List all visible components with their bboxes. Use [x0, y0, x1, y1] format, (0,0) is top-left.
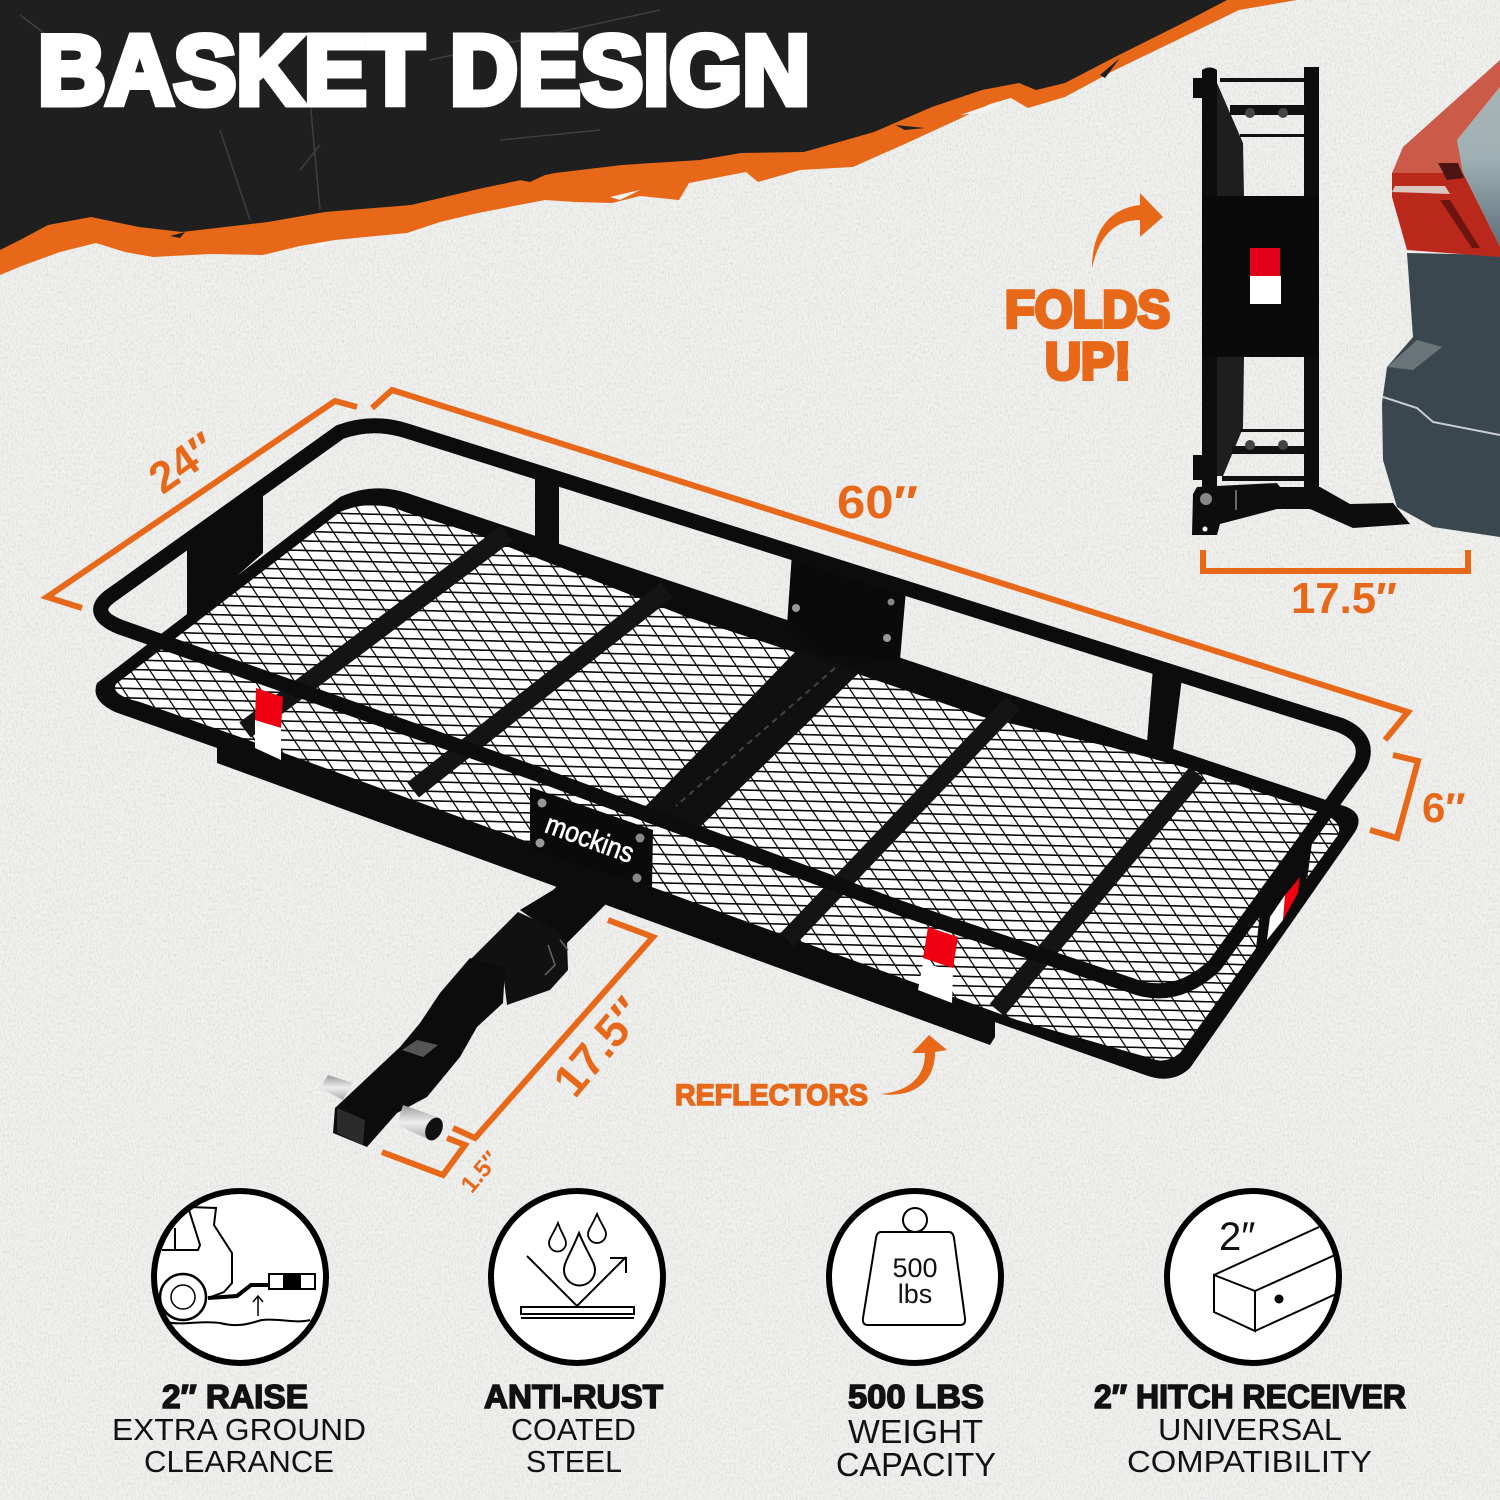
feature text: hitch: COMPATIBILITY [1127, 1444, 1372, 1479]
feature text: hitch [1094, 1378, 1406, 1479]
icon: 2 inch hitch receiver [1167, 1191, 1339, 1363]
lower floor beam [217, 735, 995, 1045]
feature text: weight: WEIGHT [848, 1413, 983, 1450]
feature text: weight [836, 1378, 996, 1483]
front reflector right [923, 927, 958, 968]
feature text: anti-rust [484, 1378, 663, 1479]
reflectors label: REFLECTORS [675, 1079, 868, 1112]
mesh floor [115, 505, 1339, 1061]
feature text: anti-rust: STEEL [526, 1444, 622, 1479]
dimension: hitch 1.5 inch: 1.5″ [456, 1146, 505, 1198]
title: BASKET DESIGN [38, 15, 810, 125]
folds up arrow [1092, 193, 1163, 268]
feature text: hitch: UNIVERSAL [1158, 1412, 1342, 1447]
icon: 500 lbs weight [829, 1191, 1001, 1363]
mockins logo: mockins [541, 808, 638, 869]
folded basket [1192, 67, 1410, 535]
folds up label: FOLDS [1005, 281, 1170, 339]
upright supports [187, 490, 263, 620]
feature text: raise: CLEARANCE [144, 1444, 334, 1479]
dimension: 6 inch: 6″ [1422, 784, 1465, 831]
cross bars [245, 533, 1197, 1010]
icon: 500 lbs weight: lbs [898, 1279, 932, 1309]
top rail [101, 426, 1363, 991]
dimension: 6 inch [1370, 755, 1465, 838]
centre fold bar [640, 650, 860, 832]
feature text: raise: 2″ RAISE [162, 1378, 308, 1415]
dimension: 24 inch: 24″ [140, 423, 226, 503]
reflectors arrow [880, 1035, 947, 1095]
feature text: anti-rust: ANTI-RUST [484, 1378, 663, 1415]
dimension: 24 inch [47, 401, 357, 608]
dimension: folded 17.5 inch: 17.5″ [1291, 574, 1397, 623]
dimension: 60 inch [372, 390, 1408, 740]
folds up label: UP! [1045, 333, 1131, 391]
feature text: raise: EXTRA GROUND [112, 1412, 366, 1447]
hitch pins [320, 1075, 353, 1100]
feature text: weight: CAPACITY [836, 1446, 996, 1483]
icon: ground clearance [154, 1191, 326, 1363]
icon: anti-rust [491, 1191, 663, 1363]
feature text: raise [112, 1378, 366, 1479]
dimension: folded 17.5 inch [1203, 550, 1468, 623]
basket product [95, 426, 1363, 1147]
floor frame [95, 488, 1359, 1079]
icon: 500 lbs weight: 500 [892, 1253, 938, 1283]
front reflector left [255, 688, 283, 728]
mockins plate [530, 787, 653, 887]
dimension: 60 inch: 60″ [837, 476, 918, 528]
header torn banner [0, 0, 1297, 275]
hitch tube [520, 857, 605, 943]
feature text: hitch: 2″ HITCH RECEIVER [1094, 1378, 1406, 1415]
icon: 2 inch hitch receiver: 2″ [1219, 1215, 1255, 1259]
feature text: weight: 500 LBS [848, 1378, 984, 1415]
feature text: anti-rust: COATED [511, 1412, 636, 1447]
dimension: hitch 1.5 inch [382, 1138, 505, 1198]
folds up label [1005, 281, 1170, 391]
side bracket plate [1253, 835, 1313, 975]
car rear [1382, 60, 1500, 537]
dimension: hitch 17.5 inch [453, 920, 654, 1138]
dimension: hitch 17.5 inch: 17.5″ [543, 987, 654, 1106]
